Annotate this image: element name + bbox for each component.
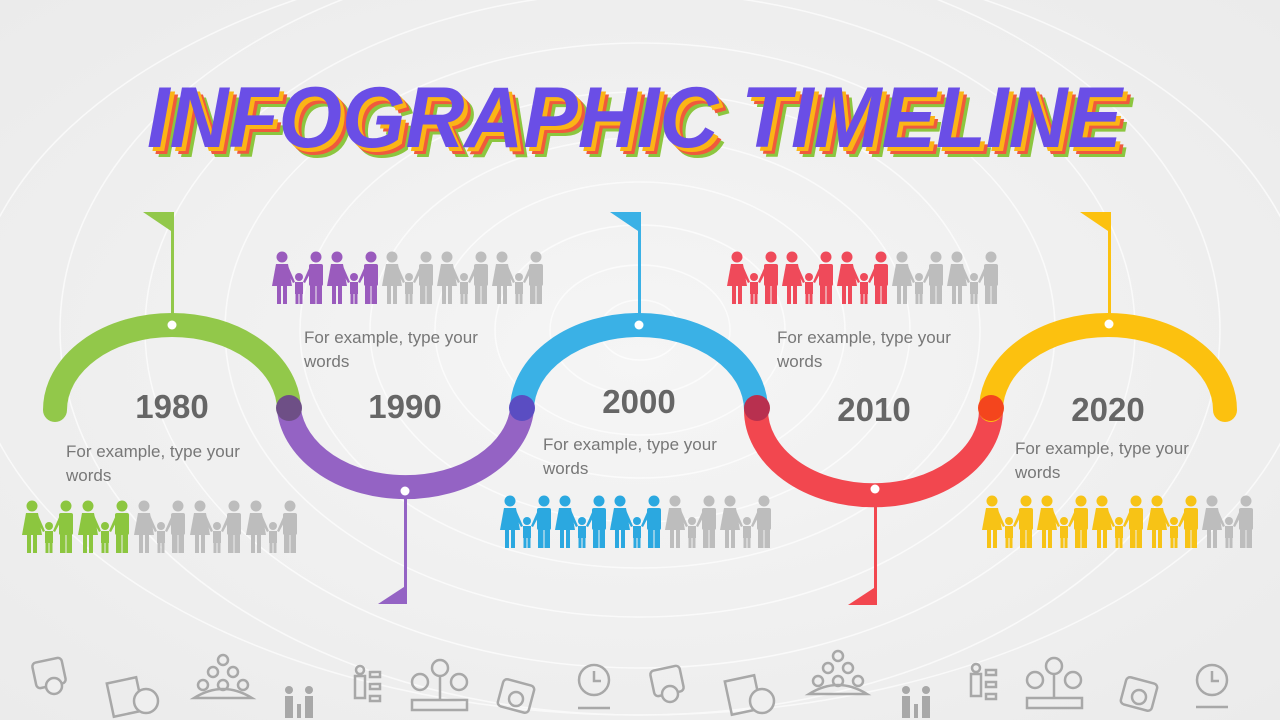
icon: family bbox=[285, 686, 313, 718]
icon: family 2 bbox=[902, 686, 930, 718]
descriptions: For example, type your bbox=[304, 328, 478, 347]
descriptions: For example, type your bbox=[777, 328, 951, 347]
icon: clock bbox=[578, 665, 610, 708]
years: 2020 bbox=[1071, 391, 1145, 428]
icon: presenter 2 bbox=[971, 664, 996, 699]
icon: calendar clock 2 bbox=[650, 665, 684, 702]
timeline wave bbox=[55, 325, 1225, 495]
years: 2000 bbox=[602, 383, 676, 420]
flag: 1990 bbox=[378, 486, 410, 604]
icon: clock 2 bbox=[1196, 665, 1228, 707]
icon: calendar bbox=[497, 678, 535, 714]
flag: 2000 bbox=[610, 212, 644, 330]
icon: checklist clock 2 bbox=[725, 675, 774, 715]
icon: checklist clock bbox=[107, 677, 158, 717]
people 1990 bbox=[272, 252, 543, 304]
flag: 2010 bbox=[848, 484, 880, 605]
descriptions: words bbox=[776, 352, 822, 371]
descriptions: words bbox=[542, 459, 588, 478]
descriptions: words bbox=[303, 352, 349, 371]
title: INFOGRAPHIC TIMELINE bbox=[147, 70, 1124, 166]
bottom icons bbox=[32, 651, 1228, 718]
flag: 2020 bbox=[1080, 212, 1114, 328]
descriptions bbox=[65, 328, 1189, 485]
people 2010 bbox=[727, 252, 998, 304]
descriptions: For example, type your bbox=[543, 435, 717, 454]
icon: presenter bbox=[355, 666, 380, 701]
years: 2010 bbox=[837, 391, 911, 428]
icon: calendar 2 bbox=[1120, 676, 1158, 712]
descriptions: For example, type your bbox=[1015, 439, 1189, 458]
joints bbox=[276, 395, 1004, 421]
flag: 1980 bbox=[143, 212, 176, 330]
years bbox=[135, 383, 1145, 428]
descriptions: words bbox=[1014, 463, 1060, 482]
descriptions: For example, type your bbox=[66, 442, 240, 461]
icon: calendar clock bbox=[32, 657, 66, 694]
title: INFOGRAPHIC TIMELINE bbox=[157, 80, 1134, 176]
descriptions: words bbox=[65, 466, 111, 485]
title: INFOGRAPHIC TIMELINE bbox=[151, 74, 1128, 170]
years: 1980 bbox=[135, 388, 209, 425]
people 2020 bbox=[982, 496, 1253, 548]
people 1980 bbox=[22, 500, 297, 553]
icon: steps 123 bbox=[412, 660, 467, 710]
people 2000 bbox=[500, 496, 771, 548]
icon: steps 123 2 bbox=[1027, 658, 1082, 708]
icon: crowd bbox=[194, 655, 252, 698]
years: 1990 bbox=[368, 388, 442, 425]
icon: crowd 2 bbox=[809, 651, 867, 694]
title: INFOGRAPHIC TIMELINE bbox=[154, 77, 1131, 173]
